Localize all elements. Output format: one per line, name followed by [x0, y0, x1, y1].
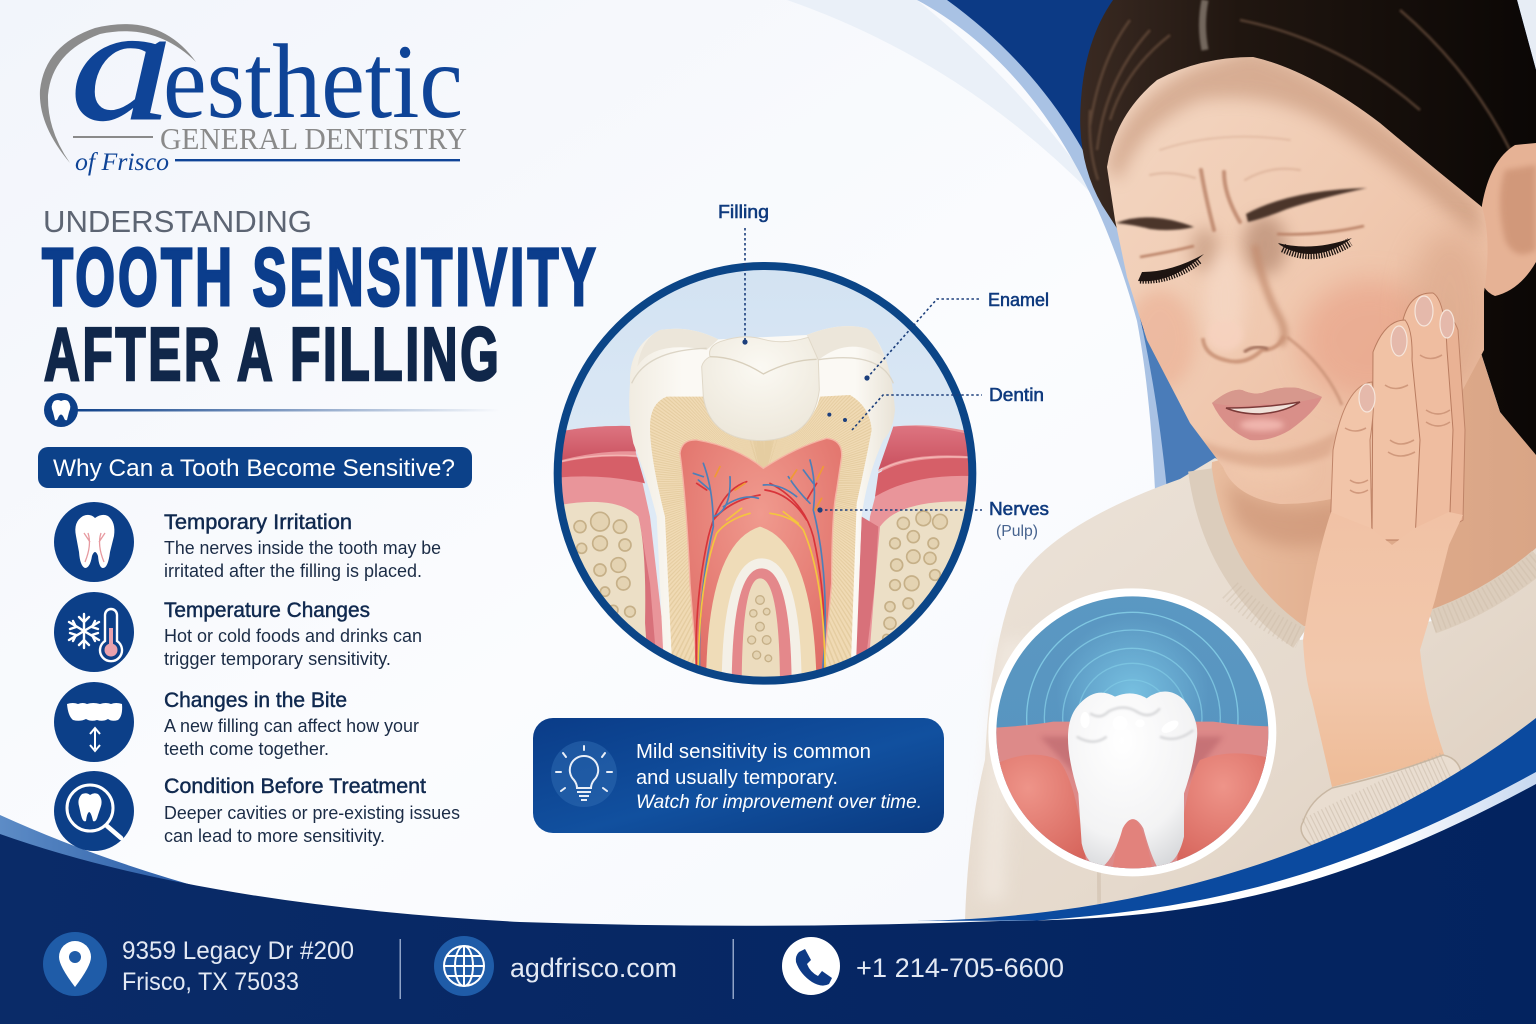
icon: map pin [43, 932, 107, 996]
left closed eye [1138, 254, 1204, 281]
ear [1480, 143, 1536, 296]
cause 3: changes in the bite [54, 682, 419, 762]
nose [1203, 245, 1284, 362]
enamel [629, 326, 895, 690]
icon: teeth with bite arrow [54, 682, 134, 762]
hair highlights [1090, 0, 1510, 180]
bottom footer band [0, 718, 1536, 1024]
filling [702, 337, 819, 441]
logo: of Frisco [75, 149, 169, 176]
portrait: woman with tooth pain [965, 0, 1536, 920]
navy base [0, 784, 1536, 1024]
right eyelid crease [1277, 226, 1364, 234]
cause 2: temperature changes: Temperature Changes [164, 599, 370, 622]
footer: phone [782, 937, 1064, 995]
logo: esthetic [163, 23, 463, 140]
finger one [1330, 382, 1374, 540]
icon: tooth with nerves [54, 502, 134, 582]
blue swoosh right [900, 718, 1536, 921]
right closed eye [1278, 238, 1352, 255]
left gum [562, 426, 663, 650]
nails [1359, 296, 1454, 412]
callout: mild sensitivity [533, 718, 944, 833]
logo [40, 0, 467, 176]
nasolabial fold [1287, 337, 1342, 405]
cause 4: condition before treatment: can lead to more sensitivity. [164, 826, 385, 846]
callout dots [742, 339, 870, 513]
title divider with tooth icon [44, 393, 500, 427]
shadow beside tooth [1040, 737, 1223, 787]
icon: globe [434, 936, 494, 996]
callout: mild sensitivity: and usually temporary. [636, 767, 838, 789]
frown wrinkles [1150, 137, 1300, 230]
hair mass [1080, 0, 1536, 458]
sweater soft shading [983, 646, 1016, 896]
cause 2: temperature changes [54, 592, 422, 672]
callout: mild sensitivity: Mild sensitivity is common [636, 741, 871, 763]
shadow under chin [1226, 486, 1330, 548]
lips [1212, 388, 1322, 440]
label: dentin: Dentin [989, 385, 1044, 405]
left eyebrow [1116, 217, 1194, 230]
title: UNDERSTANDING [43, 204, 312, 239]
inner dentin arch [706, 527, 817, 690]
enamel lobes [637, 326, 883, 367]
blue swoosh left [0, 815, 240, 898]
title: AFTER A FILLING [44, 313, 499, 397]
label: pulp: (Pulp) [996, 523, 1038, 540]
root apex layers [722, 558, 802, 690]
footer: website: agdfrisco.com [510, 953, 677, 983]
logo subtitle: GENERAL DENTISTRY [160, 121, 467, 156]
tooth highlights [1080, 712, 1180, 735]
right gum [856, 425, 968, 655]
white swoosh right [1030, 772, 1536, 921]
decorative blue swoosh behind portrait [787, 0, 1536, 490]
callout: mild sensitivity: Watch for improvement over time. [636, 792, 922, 813]
diagram ring [558, 266, 972, 681]
title: TOOTH SENSITIVITY [42, 232, 596, 323]
title [42, 204, 596, 397]
icon: phone [782, 937, 840, 995]
face [1107, 57, 1488, 504]
footer: phone: +1 214-705-6600 [856, 953, 1064, 983]
cause 3: changes in the bite: teeth come together. [164, 739, 329, 759]
jaw bone [564, 502, 646, 638]
cause 4: condition before treatment: Condition Before Treatment [164, 775, 426, 798]
logo arc [40, 24, 196, 163]
face shading layers [1107, 50, 1490, 486]
finger four [1448, 322, 1466, 522]
section heading pill: Why Can a Tooth Become Sensitive? [53, 455, 455, 482]
cause 4: condition before treatment [54, 771, 460, 851]
cause 1: temporary irritation: Temporary Irritation [164, 511, 352, 534]
cause 3: changes in the bite: Changes in the Bite [164, 689, 347, 712]
cause 2: temperature changes: trigger temporary sensitivity. [164, 649, 391, 669]
right eyebrow [1246, 188, 1367, 222]
glossy tooth [1068, 692, 1197, 867]
label: nerves: Nerves [989, 499, 1049, 519]
cause 1: temporary irritation: irritated after the filling is placed. [164, 561, 422, 581]
footer: address: 9359 Legacy Dr #200 [122, 937, 354, 965]
callout lines [745, 228, 982, 510]
finger three [1403, 293, 1453, 540]
icon: magnifier over tooth [54, 771, 134, 851]
upper gum band [980, 722, 1287, 887]
icon: snowflake and thermometer [54, 592, 134, 672]
label: filling: Filling [718, 202, 769, 222]
cause 1: temporary irritation: The nerves inside the tooth may be [164, 538, 441, 558]
nerve bundles [693, 460, 825, 680]
footer: address [43, 932, 354, 996]
sweater [965, 458, 1536, 920]
knuckle creases [1345, 355, 1450, 493]
sweater collar ribbing [1200, 470, 1536, 638]
footer: address: Frisco, TX 75033 [122, 968, 299, 996]
hand and forearm [1303, 293, 1465, 787]
pulp chamber [680, 438, 842, 690]
gum between roots [1112, 817, 1153, 873]
cause 1: temporary irritation [54, 502, 441, 582]
footer: website [434, 936, 677, 996]
tiny dentin markers [827, 413, 847, 422]
cause 4: condition before treatment: Deeper cavities or pre-existing issues [164, 803, 460, 823]
finger two [1372, 320, 1420, 540]
sleeve cuff [1301, 755, 1462, 852]
palm and wrist [1303, 512, 1463, 787]
bone pores [574, 511, 947, 642]
icon: light bulb [551, 741, 617, 807]
glow [1056, 617, 1209, 770]
tooth cross-section diagram [550, 250, 983, 700]
left eyelid crease [1140, 246, 1194, 257]
inset: sensitive tooth with waves [980, 580, 1287, 887]
signal rings [1027, 612, 1238, 824]
sweater fold [1098, 870, 1100, 905]
cause 3: changes in the bite: A new filling can affect how your [164, 716, 419, 736]
dentin [650, 395, 872, 690]
label: enamel: Enamel [988, 290, 1049, 310]
neck [1212, 354, 1536, 626]
lower gums [980, 755, 1087, 867]
tooth cusp shading [1077, 707, 1193, 742]
section heading pill [38, 447, 472, 488]
cause 2: temperature changes: Hot or cold foods and drinks can [164, 626, 422, 646]
